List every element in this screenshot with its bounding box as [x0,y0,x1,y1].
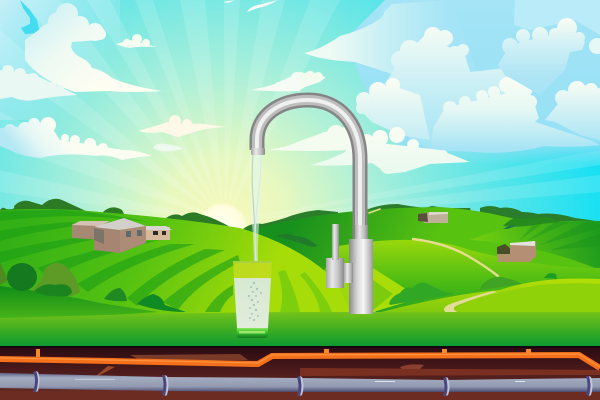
cloud: small top [116,34,157,48]
ground: green strip [0,312,600,346]
house cluster: left farmhouse [72,218,172,253]
cloud: wisps near top [223,0,303,91]
hill: lower left [0,286,158,322]
sun rays [0,0,600,222]
hill: foreground right [373,278,600,316]
house: distant centre right [418,212,448,223]
trees: centre right cluster [389,273,557,305]
cloud: left shoulder [356,78,430,140]
tree line: centre right horizon [243,204,600,232]
glass of water [233,261,272,338]
cloud: right edge [545,81,600,140]
path: winding dirt track [369,209,498,276]
hill: centre yellow green [300,240,600,312]
underground soil [0,346,600,400]
sky: bright cyan gap [20,0,40,34]
cloud: top right pale shape [514,0,600,35]
hill stripes [0,210,240,312]
trees: right hill top [503,217,560,227]
hill: left striped [0,209,352,320]
cloud: upper right towering [498,18,585,95]
tap: gooseneck spout [257,100,360,240]
house: right hillside [497,241,536,262]
fan field: behind base [300,262,420,314]
path: foreground track [444,291,497,314]
cloud: far right lobe [589,38,600,54]
tap: spout collar [251,148,265,155]
sun [197,203,247,253]
tap: neck collar [355,225,368,240]
sky: blue upper right [345,0,600,165]
tap: lever handle [326,224,353,288]
cloud: mid right [430,74,600,153]
cloud: behind tap second tier [267,125,352,151]
trees: mid slope [276,234,318,247]
cloud: cream centre [138,115,226,137]
hill: back centre right [245,207,600,312]
cloud: pale upper right band [304,0,480,80]
water bubbles [248,282,262,321]
grey water pipe [0,371,600,396]
cloud: left middle [0,65,77,101]
tree line: left horizon [0,199,232,228]
water stream [251,155,262,262]
cloud: upper left large [25,3,162,92]
tap: base column [349,239,373,314]
cloud: small centre [153,144,184,151]
cloud: small right of spout [299,71,326,90]
cloud: lower left [0,117,152,160]
bushes: lower left [0,262,186,312]
hill: right striped [470,221,600,270]
cloud: lower centre white [310,127,470,174]
hill: right foreground inner [452,283,600,315]
cloud: central towering [370,27,535,150]
orange cable [0,349,600,368]
pipe joints [33,371,592,396]
